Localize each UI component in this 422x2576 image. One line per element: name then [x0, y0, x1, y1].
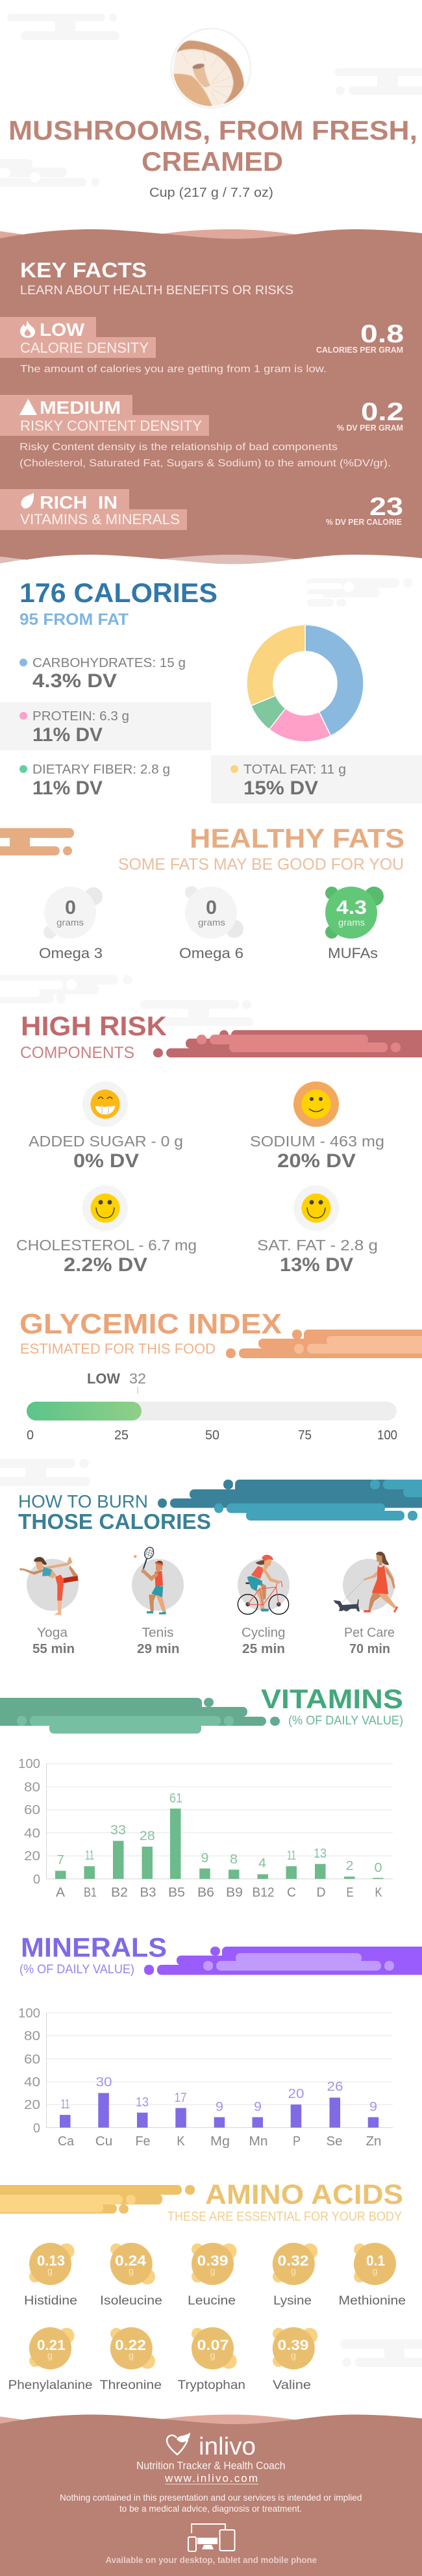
description: Risky Content density is the relationship of bad components [19, 442, 338, 453]
background cloud: bottom right [340, 2340, 422, 2367]
legend: dietary fiber [19, 763, 170, 799]
chart: vitamins bar chart [18, 1757, 393, 1900]
label: rich in: RICH IN [40, 492, 118, 512]
amino: methionine: g [373, 2266, 378, 2276]
panel: amino acids [0, 2179, 406, 2392]
chart: minerals bar chart: 13 [136, 2095, 149, 2110]
description [19, 442, 391, 469]
subheading: components: COMPONENTS [20, 1044, 134, 1062]
panel: calories [0, 577, 422, 803]
panel: minerals [18, 1932, 422, 2149]
chart: minerals bar chart: 11 [61, 2097, 70, 2112]
panel: glycemic index [19, 1308, 422, 1443]
activity: tennis [132, 1546, 184, 1656]
badge: omega 6: grams [198, 917, 225, 928]
legend: total fat: TOTAL FAT: 11 g [243, 763, 346, 777]
amino: lysine [273, 2243, 317, 2308]
heading: amino acids: AMINO ACIDS [205, 2179, 403, 2210]
amino: isoleucine: 0.24 [115, 2253, 147, 2269]
chart: vitamins bar chart: 100 [18, 1757, 40, 1771]
chart: minerals bar chart: 9 [216, 2100, 223, 2114]
chart: vitamins bar chart: A [56, 1886, 66, 1900]
disclaimer: to be a medical advice, diagnosis or treatment. [119, 2503, 302, 2514]
amino: methionine [339, 2243, 406, 2308]
chart: vitamins bar chart: 9 [201, 1851, 209, 1865]
label: vitamins and minerals: VITAMINS & MINERALS [20, 511, 180, 527]
legend: dietary fiber: DIETARY FIBER: 2.8 g [32, 763, 170, 777]
chart: minerals bar chart: 9 [369, 2100, 377, 2114]
legend: carbohydrates: CARBOHYDRATES: 15 g [32, 656, 186, 670]
badge: omega 6 [179, 886, 243, 961]
activity: yoga: Yoga [37, 1626, 68, 1640]
heading: how to burn: HOW TO BURN [18, 1491, 148, 1511]
item: saturated fat [257, 1185, 378, 1276]
decoration: orange streaks [0, 828, 74, 855]
activity: pet care: Pet Care [344, 1626, 395, 1640]
chart: minerals bar chart: 100 [18, 2006, 40, 2021]
subheading: glycemic index: ESTIMATED FOR THIS FOOD [20, 1341, 216, 1357]
chart: vitamins bar chart: B9 [226, 1886, 243, 1900]
amino: histidine: g [47, 2266, 53, 2276]
chart: minerals bar chart: Fe [135, 2134, 151, 2149]
gauge scale: 50 [205, 1428, 219, 1443]
amino: methionine: 0.1 [366, 2253, 385, 2269]
chart: vitamins bar chart: B12 [252, 1886, 274, 1900]
amino: histidine: Histidine [24, 2294, 77, 2308]
badge: omega 3: 0 [65, 897, 76, 918]
heading: vitamins: VITAMINS [261, 1684, 403, 1714]
subheading: key facts: LEARN ABOUT HEALTH BENEFITS OR RISKS [20, 284, 293, 297]
amino: methionine: Methionine [339, 2294, 406, 2308]
badge: mufas [325, 887, 384, 961]
amino: leucine: Leucine [188, 2294, 236, 2308]
footer [0, 2415, 422, 2576]
chart: minerals bar chart: Ca [58, 2134, 75, 2149]
chart: vitamins bar chart: E [347, 1886, 353, 1900]
legend: carbohydrates [19, 656, 186, 692]
legend backgrounds [0, 702, 422, 803]
background cloud: mid left [0, 975, 132, 1004]
amino: phenylalanine: g [47, 2350, 53, 2360]
chart: minerals bar chart: 60 [24, 2052, 40, 2067]
unit: dv per calorie: % DV PER CALORIE [326, 517, 402, 527]
gauge scale: 100 [377, 1428, 397, 1443]
amino: isoleucine: Isoleucine [100, 2294, 162, 2308]
decoration: red streaks [153, 1030, 422, 1057]
subheading: amino acids: THESE ARE ESSENTIAL FOR YOUR BODY [168, 2210, 402, 2224]
chart: minerals bar chart: 80 [24, 2029, 40, 2043]
heading: glycemic index: GLYCEMIC INDEX [19, 1308, 282, 1340]
label: calorie density: CALORIE DENSITY [20, 340, 149, 356]
amino: valine: Valine [273, 2379, 311, 2392]
amino: tryptophan [178, 2327, 245, 2392]
activity: cycling [238, 1555, 290, 1656]
decoration: orange streaks [226, 1330, 422, 1358]
label: medium: MEDIUM [40, 398, 121, 418]
chart: minerals bar chart: 26 [327, 2080, 343, 2094]
chart: minerals bar chart: Mn [249, 2134, 267, 2149]
amino: phenylalanine: 0.21 [37, 2337, 65, 2353]
title [8, 115, 417, 177]
unit: calories per gram: CALORIES PER GRAM [316, 345, 403, 355]
website: www.inlivo.com [164, 2472, 258, 2484]
panel: how to burn calories [18, 1480, 422, 1656]
item: sodium: SODIUM - 463 mg [250, 1133, 384, 1150]
subheading: vitamins: (% OF DAILY VALUE) [288, 1714, 403, 1728]
subheading: minerals: (% OF DAILY VALUE) [19, 1963, 134, 1976]
amino: leucine: g [210, 2266, 216, 2276]
gauge scale: 0 [27, 1428, 34, 1443]
amino: phenylalanine [8, 2327, 92, 2392]
panel: key facts [0, 229, 422, 564]
chart: minerals bar chart: 17 [174, 2091, 187, 2105]
amino: tryptophan: 0.07 [197, 2337, 229, 2353]
chart: vitamins bar chart: B6 [197, 1886, 214, 1900]
badge: omega 3: grams [56, 917, 84, 928]
chart: vitamins bar chart: 80 [24, 1780, 40, 1795]
title: CREAMED [142, 146, 283, 177]
chart: vitamins bar chart: B1 [84, 1886, 97, 1900]
chart: vitamins bar chart: 0 [33, 1873, 40, 1887]
amino: phenylalanine: Phenylalanine [8, 2379, 92, 2392]
chart: vitamins bar chart: 4 [258, 1856, 266, 1871]
chart: minerals bar chart: 20 [24, 2098, 40, 2112]
legend: carbohydrates: 4.3% DV [32, 670, 117, 692]
badge: omega 6: 0 [206, 897, 217, 918]
badge: mufas: 4.3 [336, 897, 367, 918]
heading: calories: 176 CALORIES [19, 577, 217, 608]
chart: minerals bar chart: 20 [288, 2087, 304, 2101]
icon: inlivo heart logo [167, 2432, 190, 2455]
chart: vitamins bar chart: B5 [168, 1886, 185, 1900]
activity: pet care [333, 1552, 398, 1656]
badge: omega 3 [39, 887, 103, 961]
panel: high risk [16, 1011, 422, 1276]
amino: isoleucine [100, 2243, 162, 2308]
heading: healthy fats: HEALTHY FATS [190, 823, 404, 853]
item: added sugar: 0% DV [73, 1150, 139, 1172]
icon: leaf [21, 493, 34, 509]
chart: minerals bar chart: Mg [210, 2134, 230, 2149]
description: The amount of calories you are getting from 1 gram is low. [20, 364, 327, 375]
fact: calorie density [0, 317, 404, 375]
disclaimer [60, 2492, 362, 2514]
label: risky content density: RISKY CONTENT DENSITY [20, 418, 202, 434]
chart: vitamins bar chart: 11 [85, 1849, 94, 1863]
amino: valine: g [291, 2350, 296, 2360]
amino: histidine [24, 2243, 77, 2308]
panel: healthy fats [0, 823, 404, 961]
heading: high risk: HIGH RISK [21, 1011, 167, 1041]
item: sodium [250, 1081, 384, 1172]
chart: vitamins bar chart: 0 [374, 1861, 382, 1875]
amino: valine: 0.39 [278, 2337, 309, 2353]
chart: vitamins bar chart: 33 [110, 1823, 126, 1837]
chart: vitamins bar chart: 61 [169, 1791, 182, 1806]
gauge scale: 25 [114, 1428, 129, 1443]
chart: minerals bar chart [18, 2006, 393, 2149]
chart: vitamins bar chart: 28 [140, 1829, 155, 1843]
item: sodium: 20% DV [277, 1150, 356, 1172]
tagline: Nutrition Tracker & Health Coach [136, 2459, 286, 2472]
chart: minerals bar chart: 30 [96, 2075, 112, 2090]
amino: isoleucine: g [129, 2266, 134, 2276]
activity: tennis: Tenis [142, 1626, 174, 1640]
badge: mufas: grams [338, 917, 365, 928]
disclaimer: Nothing contained in this presentation and our services is intended or implied [60, 2492, 362, 2503]
value: 0.2: 0.2 [361, 398, 404, 426]
icon: warning triangle [19, 399, 37, 415]
chart: macronutrient donut [247, 625, 364, 742]
amino: tryptophan: Tryptophan [178, 2379, 245, 2392]
chart: minerals bar chart: 40 [24, 2075, 40, 2090]
value: 0.8: 0.8 [360, 320, 404, 348]
chart: vitamins bar chart: B2 [111, 1886, 128, 1900]
chart: vitamins bar chart: 2 [345, 1859, 353, 1873]
chart: vitamins bar chart: B3 [140, 1886, 156, 1900]
item: added sugar [29, 1081, 183, 1172]
legend: total fat [230, 763, 346, 799]
gauge label: 32 [129, 1370, 146, 1387]
amino: leucine: 0.39 [197, 2253, 229, 2269]
background cloud: top right [334, 68, 422, 95]
icon: flame [20, 320, 35, 338]
heading: minerals: MINERALS [21, 1932, 167, 1963]
heading: key facts: KEY FACTS [20, 259, 147, 282]
amino: lysine: g [291, 2266, 296, 2276]
chart: vitamins bar chart: K [375, 1886, 382, 1900]
fact: rich in vitamins and minerals [0, 489, 403, 530]
amino: tryptophan: g [210, 2350, 216, 2360]
gauge label [87, 1370, 146, 1387]
activity: pet care: 70 min [349, 1642, 390, 1656]
value: 23: 23 [369, 493, 403, 521]
chart: vitamins bar chart: 8 [230, 1852, 238, 1867]
chart: vitamins bar chart: 13 [314, 1847, 327, 1861]
legend: protein: PROTEIN: 6.3 g [32, 709, 129, 724]
availability note: Available on your desktop, tablet and mobile phone [105, 2555, 317, 2565]
amino: threonine: Threonine [100, 2379, 162, 2392]
description: (Cholesterol, Saturated Fat, Sugars & Sodium) to the amount (%DV/gr). [19, 458, 391, 469]
item: cholesterol [16, 1185, 197, 1276]
item: saturated fat: 13% DV [280, 1254, 353, 1276]
item: saturated fat: SAT. FAT - 2.8 g [257, 1237, 378, 1254]
gauge scale: 75 [298, 1428, 312, 1443]
label: low: LOW [40, 320, 85, 340]
amino: leucine [188, 2243, 236, 2308]
decoration: purple streaks [144, 1947, 422, 1975]
subheading: healthy fats: SOME FATS MAY BE GOOD FOR YOU [118, 855, 404, 874]
legend: total fat: 15% DV [243, 777, 318, 799]
activity: cycling: Cycling [242, 1626, 286, 1640]
chart: vitamins bar chart: 20 [24, 1849, 40, 1863]
logo wordmark: inlivo [199, 2433, 256, 2460]
legend: protein: 11% DV [32, 724, 103, 746]
legend: protein [19, 709, 129, 746]
amino: threonine: g [129, 2350, 134, 2360]
unit: dv per gram: % DV PER GRAM [337, 423, 403, 433]
serving size: Cup (217 g / 7.7 oz) [149, 186, 273, 200]
activity: yoga [19, 1557, 79, 1656]
icon: mushroom photo [171, 29, 251, 108]
badge: mufas: MUFAs [328, 945, 378, 961]
chart: minerals bar chart: 9 [254, 2100, 262, 2114]
chart: minerals bar chart: Zn [366, 2134, 382, 2149]
badge: omega 6: Omega 6 [179, 945, 243, 961]
gauge bar [27, 1387, 397, 1421]
heading: those calories: THOSE CALORIES [18, 1509, 211, 1534]
title: MUSHROOMS, FROM FRESH, [8, 115, 417, 145]
item: added sugar: ADDED SUGAR - 0 g [29, 1133, 183, 1150]
chart: vitamins bar chart: 60 [24, 1803, 40, 1817]
activity: cycling: 25 min [242, 1642, 285, 1656]
chart: vitamins bar chart: D [317, 1886, 326, 1900]
item: cholesterol: 2.2% DV [64, 1254, 147, 1276]
chart: vitamins bar chart: 11 [287, 1849, 296, 1863]
chart: minerals bar chart: K [177, 2134, 185, 2149]
amino: threonine [100, 2327, 162, 2392]
chart: vitamins bar chart: 7 [57, 1853, 64, 1867]
amino: histidine: 0.13 [37, 2253, 65, 2269]
decoration: green streaks [0, 1698, 280, 1734]
chart: vitamins bar chart: 40 [24, 1826, 40, 1841]
item: cholesterol: CHOLESTEROL - 6.7 mg [16, 1237, 197, 1254]
background cloud: title left [0, 159, 99, 186]
chart: minerals bar chart: Cu [95, 2134, 112, 2149]
background cloud: top left [7, 14, 119, 40]
decoration: yellow streaks [0, 2185, 195, 2214]
fact: risky content density [0, 395, 404, 469]
chart: vitamins bar chart: C [287, 1886, 296, 1900]
chart: minerals bar chart: Se [326, 2134, 343, 2149]
decoration: teal streaks [158, 1480, 422, 1521]
activity: yoga: 55 min [32, 1642, 75, 1656]
chart: minerals bar chart: 0 [33, 2121, 40, 2136]
gauge scale [27, 1428, 397, 1443]
badge: omega 3: Omega 3 [39, 945, 103, 961]
icon: devices [188, 2524, 235, 2551]
background cloud: burn left [0, 1459, 90, 1486]
chart: minerals bar chart: P [293, 2134, 301, 2149]
activity: tennis: 29 min [137, 1642, 179, 1656]
amino: lysine: Lysine [273, 2294, 312, 2308]
amino: valine [273, 2327, 317, 2392]
panel: vitamins [0, 1684, 403, 1900]
subheading: from fat: 95 FROM FAT [19, 611, 129, 629]
legend: dietary fiber: 11% DV [32, 777, 103, 799]
background cloud [307, 578, 412, 607]
gauge label: LOW [87, 1370, 120, 1387]
background cloud: behind high risk [140, 1000, 253, 1026]
amino: threonine: 0.22 [115, 2337, 146, 2353]
amino: lysine: 0.32 [278, 2253, 309, 2269]
